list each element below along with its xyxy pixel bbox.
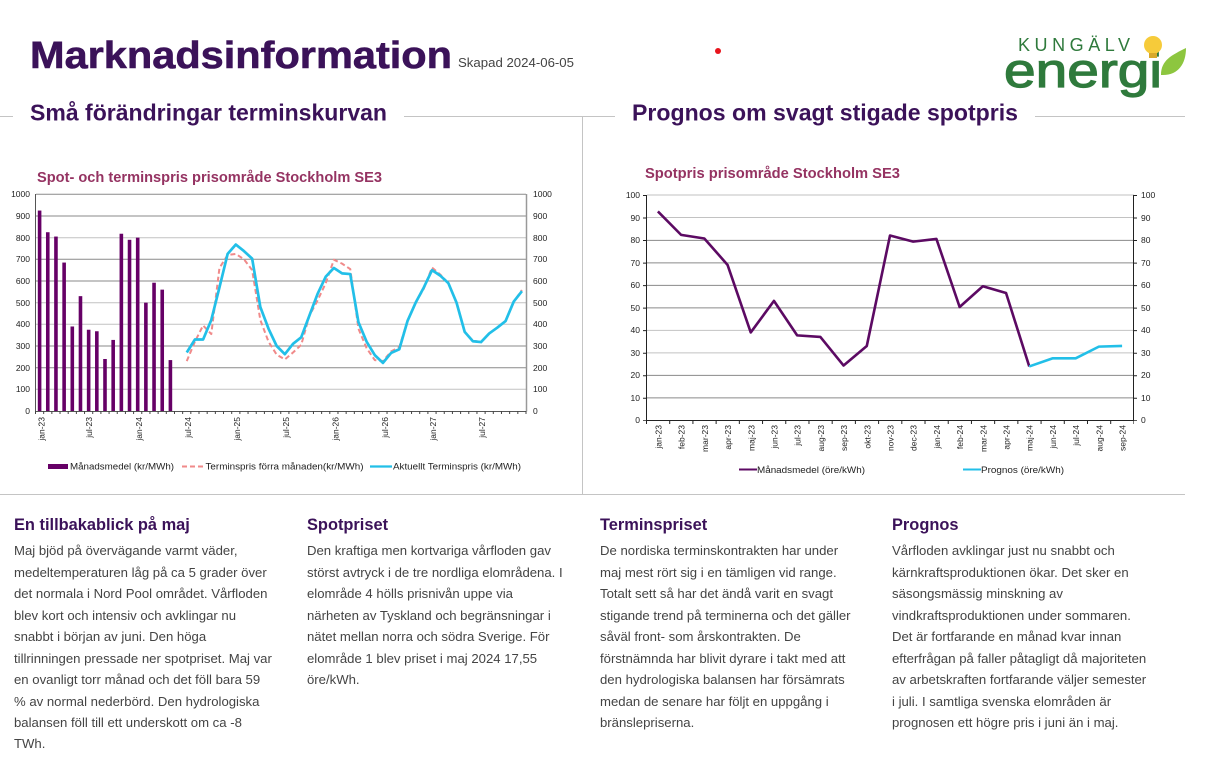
text block: En tillbakablick på maj: TWh. xyxy=(14,736,45,751)
text block: En tillbakablick på maj: % av normal nederbörd. Den hydrologiska xyxy=(14,694,260,709)
logo: Kungälv Energi xyxy=(1004,35,1186,98)
x axis labels: jul-23 xyxy=(793,425,803,447)
text block: En tillbakablick på maj: blev kort och intensiv och avklingar nu xyxy=(14,608,236,623)
created date: Skapad 2024-06-05 xyxy=(458,56,574,70)
x axis labels: jun-23 xyxy=(770,425,780,450)
heading: left section: Små förändringar terminskurvan xyxy=(30,100,387,126)
red dot xyxy=(715,48,721,54)
right axis labels: 200 xyxy=(533,363,547,373)
right axis labels xyxy=(533,189,552,416)
x axis labels xyxy=(654,425,1128,452)
current forward price line xyxy=(187,245,522,363)
right axis labels: 1000 xyxy=(533,189,552,199)
chart title: Spot- och terminspris prisområde Stockholm SE3 xyxy=(37,170,382,186)
text block: Spotpriset: Den kraftiga men kortvariga vårfloden gav xyxy=(307,543,551,558)
right axis labels xyxy=(1141,190,1155,425)
x axis labels: apr-23 xyxy=(723,425,733,450)
left axis labels: 700 xyxy=(16,254,30,264)
right axis labels: 100 xyxy=(533,384,547,394)
x axis labels: jul-24 xyxy=(183,417,193,439)
text block: Spotpriset: öre/kWh. xyxy=(307,672,360,687)
x axis labels: nov-23 xyxy=(886,425,896,451)
text block: En tillbakablick på maj: snabbt i början av juni. Den höga xyxy=(14,629,207,644)
previous month forward price line xyxy=(187,254,522,361)
legend: Månadsmedel (kr/MWh) xyxy=(70,462,174,472)
heading: right section: Prognos om svagt stigade spotpris xyxy=(632,100,1018,126)
text block: En tillbakablick på maj: det normala i Nord Pool området. Vårfloden xyxy=(14,586,267,601)
right axis labels: 100 xyxy=(1141,190,1155,200)
axes xyxy=(646,195,1134,420)
x axis labels: mar-23 xyxy=(700,425,710,452)
x axis labels: jan-26 xyxy=(330,417,340,442)
left axis labels: 50 xyxy=(631,303,640,313)
left axis labels: 40 xyxy=(631,325,640,335)
right axis labels: 80 xyxy=(1141,235,1151,245)
x axis labels: jun-24 xyxy=(1048,425,1058,450)
chart: spot and forward price SE3 xyxy=(11,170,552,472)
x axis labels: maj-23 xyxy=(746,425,756,451)
right axis labels: 40 xyxy=(1141,325,1151,335)
legend: Terminspris förra månaden(kr/MWh) xyxy=(206,462,364,472)
right axis labels: 10 xyxy=(1141,393,1151,403)
x axis labels: jan-24 xyxy=(932,425,942,450)
left axis labels: 90 xyxy=(631,213,640,223)
x axis labels xyxy=(36,417,487,442)
x axis labels: aug-23 xyxy=(816,425,826,451)
right axis labels: 30 xyxy=(1141,348,1151,358)
text block: Terminspriset: stigande trend på terminerna och det gäller xyxy=(600,608,851,623)
right axis labels: 300 xyxy=(533,341,547,351)
text block: Prognos: efterfrågan på faller påtagligt då majoriteten xyxy=(892,651,1146,666)
text block: En tillbakablick på maj: tillrinningen pressade ner spotpriset. Maj var xyxy=(14,651,272,666)
right axis labels: 20 xyxy=(1141,370,1151,380)
text block: Spotpriset xyxy=(307,516,563,687)
x axis labels: jan-27 xyxy=(428,417,438,442)
text block: Spotpriset: elområde 1 blev priset i maj 2024 17,55 xyxy=(307,651,537,666)
monthly average bars xyxy=(38,211,172,411)
left axis labels: 0 xyxy=(25,406,30,416)
legend: Månadsmedel (öre/kWh) xyxy=(757,465,865,475)
chart: spot price SE3 xyxy=(626,166,1155,475)
text block: Prognos: kärnkraftsproduktionen ökar. Det sker en xyxy=(892,565,1129,580)
left axis labels: 80 xyxy=(631,235,640,245)
title: Marknadsinformation xyxy=(30,35,452,77)
left axis labels: 800 xyxy=(16,233,30,243)
text block: Terminspriset: Terminspriset xyxy=(600,516,708,534)
right axis labels: 500 xyxy=(533,298,547,308)
left axis labels: 0 xyxy=(635,415,640,425)
left axis labels: 100 xyxy=(626,190,640,200)
text block: Terminspriset: medan de senare har följt en uppgång i xyxy=(600,694,829,709)
text block: Terminspriset: De nordiska terminskontrakten har under xyxy=(600,543,839,558)
x axis labels: jul-23 xyxy=(84,417,94,439)
text block: En tillbakablick på maj: en ovanligt torr månad och det föll bara 59 xyxy=(14,672,260,687)
left axis labels: 200 xyxy=(16,363,30,373)
left axis labels: 70 xyxy=(631,258,640,268)
text block: Terminspriset: såväl front- som årskontrakten. De xyxy=(600,629,801,644)
text block: Prognos: i juli. I samtliga svenska elområden är xyxy=(892,694,1112,709)
text block: Prognos: av arbetskraften fortfarande väljer semester xyxy=(892,672,1147,687)
x axis labels: dec-23 xyxy=(909,425,919,451)
x axis labels: jul-24 xyxy=(1071,425,1081,447)
text block: Terminspriset: förstnämnda har blivit dyrare i takt med att xyxy=(600,651,846,666)
x axis labels: apr-24 xyxy=(1002,425,1012,450)
left axis labels: 10 xyxy=(631,393,640,403)
right axis labels: 700 xyxy=(533,254,547,264)
text block: Terminspriset xyxy=(600,516,851,730)
x axis labels: jul-25 xyxy=(281,417,291,439)
logo: Kungälv Energi: energi xyxy=(1004,45,1162,98)
left axis labels: 600 xyxy=(16,276,30,286)
right axis labels: 900 xyxy=(533,211,547,221)
left axis labels: 400 xyxy=(16,319,30,329)
legend: Prognos (öre/kWh) xyxy=(981,465,1064,475)
text block: Prognos xyxy=(892,516,1147,730)
text block: Spotpriset: Spotpriset xyxy=(307,516,389,534)
text block: En tillbakablick på maj: medeltemperaturen låg på ca 5 grader över xyxy=(14,565,267,580)
left axis labels: 1000 xyxy=(11,189,30,199)
x axis labels: feb-24 xyxy=(955,425,965,449)
left axis labels: 20 xyxy=(631,370,640,380)
legend xyxy=(48,462,521,472)
left axis labels: 500 xyxy=(16,298,30,308)
left axis labels: 60 xyxy=(631,280,640,290)
axes xyxy=(36,194,526,412)
x axis labels: jan-23 xyxy=(36,417,46,442)
x axis labels: jan-24 xyxy=(134,417,144,442)
left axis labels: 900 xyxy=(16,211,30,221)
x axis labels: jul-27 xyxy=(477,417,487,439)
legend xyxy=(739,465,1064,475)
x axis labels: feb-23 xyxy=(677,425,687,449)
x axis labels: jul-26 xyxy=(380,417,390,439)
forecast line xyxy=(1029,346,1122,366)
right axis labels: 800 xyxy=(533,233,547,243)
x axis labels: sep-24 xyxy=(1118,425,1128,451)
x axis labels: jan-25 xyxy=(232,417,242,442)
text block: En tillbakablick på maj: Maj bjöd på övervägande varmt väder, xyxy=(14,543,238,558)
right axis labels: 60 xyxy=(1141,280,1151,290)
text block: Terminspriset: den hydrologiska balansen har försämrats xyxy=(600,672,845,687)
text block: Spotpriset: elområde 4 hölls prisnivån uppe via xyxy=(307,586,514,601)
text block: Terminspriset: Totalt sett så har det ändå varit en svagt xyxy=(600,586,833,601)
right axis labels: 50 xyxy=(1141,303,1151,313)
logo: Kungälv Energi: KUNGÄLV xyxy=(1018,35,1130,55)
right axis labels: 0 xyxy=(1141,415,1146,425)
text block: Terminspriset: bränslepriserna. xyxy=(600,715,694,730)
section rules xyxy=(0,116,1185,494)
right axis labels: 0 xyxy=(533,406,538,416)
x axis labels: aug-24 xyxy=(1094,425,1104,451)
text block: Spotpriset: nätet mellan norra och södra Sverige. För xyxy=(307,629,550,644)
monthly average line xyxy=(658,211,1029,366)
x axis labels: jan-23 xyxy=(654,425,664,450)
text block: En tillbakablick på maj: balansen föll till ett underskott om ca -8 xyxy=(14,715,242,730)
left axis labels xyxy=(11,189,30,416)
right axis labels: 400 xyxy=(533,319,547,329)
x axis labels: okt-23 xyxy=(862,425,872,449)
right axis labels: 90 xyxy=(1141,213,1151,223)
legend: Aktuellt Terminspris (kr/MWh) xyxy=(393,462,521,472)
left axis labels xyxy=(626,190,640,425)
text block: Prognos: säsongsmässig minskning av xyxy=(892,586,1063,601)
left axis labels: 30 xyxy=(631,348,640,358)
left axis labels: 100 xyxy=(16,384,30,394)
text block: En tillbakablick på maj xyxy=(14,516,272,751)
x axis labels: maj-24 xyxy=(1025,425,1035,451)
right axis labels: 70 xyxy=(1141,258,1151,268)
text block: Spotpriset: närheten av Tyskland och begränsningar i xyxy=(307,608,551,623)
text block: Prognos: Det är fortfarande en månad kvar innan xyxy=(892,629,1121,644)
text block: Prognos: vindkraftsproduktionen under sommaren. xyxy=(892,608,1131,623)
text block: Prognos: Prognos xyxy=(892,516,958,534)
text block: Terminspriset: maj mest rört sig i en tämligen vid range. xyxy=(600,565,837,580)
text block: Spotpriset: störst avtryck i de tre nordliga elområdena. I xyxy=(307,565,563,580)
right axis labels: 600 xyxy=(533,276,547,286)
left axis labels: 300 xyxy=(16,341,30,351)
x axis labels: sep-23 xyxy=(839,425,849,451)
text block: En tillbakablick på maj: En tillbakablick på maj xyxy=(14,516,190,534)
chart title: Spotpris prisområde Stockholm SE3 xyxy=(645,166,900,182)
text block: Prognos: prognosen ett högre pris i juni än i maj. xyxy=(892,715,1118,730)
text block: Prognos: Vårfloden avklingar just nu snabbt och xyxy=(892,543,1115,558)
x axis labels: mar-24 xyxy=(978,425,988,452)
